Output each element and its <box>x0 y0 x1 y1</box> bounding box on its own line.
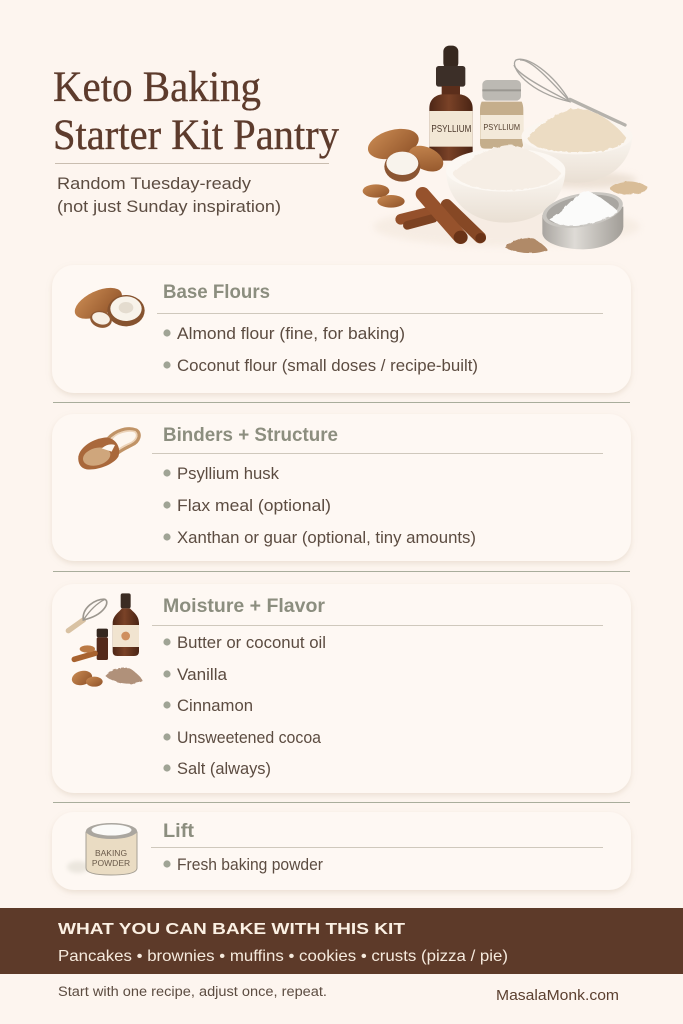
banner: what you can bake: Pancakes • brownies • muffins • cookies • crusts (pizza / pie) <box>58 948 508 965</box>
icon: metal tin of baking powder <box>540 187 626 249</box>
title: Starter Kit Pantry <box>53 112 339 159</box>
list: base flours items <box>163 325 478 375</box>
heading: Moisture + Flavor <box>163 595 325 617</box>
list: binders items: Psyllium husk <box>177 465 280 483</box>
list: binders items <box>163 465 476 547</box>
subtitle: (not just Sunday inspiration) <box>57 198 281 216</box>
panel: lift <box>52 812 631 890</box>
icon: dropper bottle <box>429 46 473 161</box>
footer note: Start with one recipe, adjust once, repeat. <box>58 984 327 999</box>
subtitle: Random Tuesday-ready <box>57 175 252 193</box>
panel: binders + structure <box>52 414 631 561</box>
icon: psyllium scoop <box>78 429 139 470</box>
icon: back bowl of almond flour <box>522 108 632 183</box>
footer brand: MasalaMonk.com <box>496 987 619 1004</box>
subtitle <box>57 175 281 216</box>
icon: dropper bottle: PSYLLIUM <box>431 124 471 135</box>
list: moisture items: Unsweetened cocoa <box>177 729 322 747</box>
list: moisture items <box>163 634 326 778</box>
icon: almond and coconut <box>70 281 145 330</box>
panel: moisture + flavor <box>52 584 631 793</box>
icon: psyllium jar <box>480 80 524 149</box>
icon: baking powder tin: BAKING <box>95 848 127 858</box>
list: moisture items: Butter or coconut oil <box>177 634 326 652</box>
banner: what you can bake: WHAT YOU CAN BAKE WITH THIS KIT <box>58 921 405 938</box>
heading: Binders + Structure <box>163 424 338 446</box>
icon: baking powder tin: POWDER <box>92 858 130 868</box>
title: Keto Baking <box>53 64 261 111</box>
panel: base flours <box>52 265 631 393</box>
icon: whisk <box>514 59 625 125</box>
hero illustration: keto baking ingredients <box>363 46 647 253</box>
icon: spice piles <box>505 181 647 253</box>
list: base flours items: Almond flour (fine, for baking) <box>177 325 405 343</box>
list: base flours items: Coconut flour (small doses / recipe-built) <box>177 357 478 375</box>
list: binders items: Xanthan or guar (optional, tiny amounts) <box>177 529 476 547</box>
list: moisture items: Salt (always) <box>177 760 271 778</box>
icon: baking powder tin <box>67 823 137 875</box>
title <box>53 64 339 159</box>
heading: Lift <box>163 820 195 842</box>
icon: almonds and coconut <box>363 124 447 208</box>
icon: front bowl of coconut flour <box>446 145 565 223</box>
list: lift items: Fresh baking powder <box>177 856 323 874</box>
icon: cinnamon sticks <box>401 194 486 244</box>
list: binders items: Flax meal (optional) <box>177 497 331 515</box>
heading: Base Flours <box>163 281 270 303</box>
banner: what you can bake <box>0 908 683 974</box>
list: moisture items: Vanilla <box>177 666 228 684</box>
list: moisture items: Cinnamon <box>177 697 253 715</box>
icon: psyllium jar: PSYLLIUM <box>483 122 520 132</box>
icon: whisk, bottles, almonds and cocoa <box>68 593 143 687</box>
